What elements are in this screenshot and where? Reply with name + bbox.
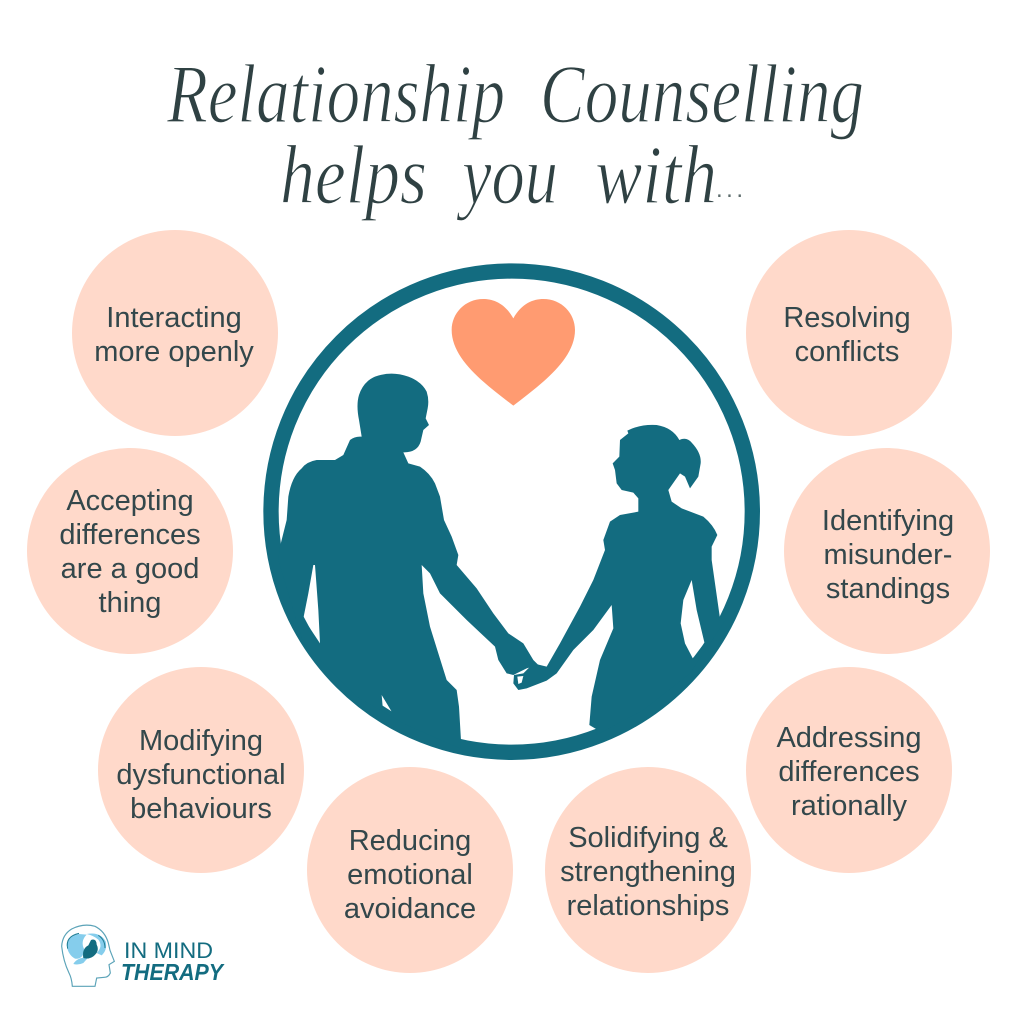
- panel: addressing differences rationally: Addressing: [776, 722, 922, 754]
- title: Relationship: [166, 48, 505, 141]
- logo wordmark: [121, 938, 225, 985]
- panel: accepting differences: [27, 448, 233, 654]
- panel: interacting more openly: Interacting: [106, 302, 242, 334]
- panel: accepting differences: thing: [99, 587, 161, 619]
- panel: modifying dysfunctional behaviours: dysfunctional: [116, 759, 286, 791]
- logo: In Mind Therapy: [62, 925, 225, 986]
- title: with: [595, 129, 717, 222]
- panel: reducing emotional avoidance: avoidance: [344, 893, 476, 925]
- panel: modifying dysfunctional behaviours: behaviours: [130, 793, 272, 825]
- panel: identifying misunderstandings: Identifying: [822, 505, 954, 537]
- panel: identifying misunderstandings: standings: [826, 573, 950, 605]
- icon: ring: [271, 271, 752, 752]
- panel: reducing emotional avoidance: Reducing: [349, 825, 471, 857]
- panel: solidifying and strengthening relationships: [545, 767, 751, 973]
- panel: modifying dysfunctional behaviours: Modifying: [139, 725, 263, 757]
- title: helps: [280, 129, 427, 222]
- panel: addressing differences rationally: differences: [778, 756, 920, 788]
- title: [166, 48, 864, 222]
- icon: woman silhouette: [513, 425, 727, 735]
- panel: interacting more openly: [72, 230, 278, 436]
- panel: addressing differences rationally: rationally: [791, 790, 908, 822]
- panel: solidifying and strengthening relationships: Solidifying &: [568, 822, 728, 854]
- panel: identifying misunderstandings: misunder-: [824, 539, 952, 571]
- icon: heart: [452, 299, 575, 406]
- panel: interacting more openly: more openly: [94, 336, 254, 368]
- logo wordmark: IN MIND: [124, 938, 213, 963]
- title: you: [456, 129, 558, 222]
- icon: clasped hands gap: [517, 676, 523, 684]
- panel: reducing emotional avoidance: [307, 767, 513, 973]
- panel: solidifying and strengthening relationships: relationships: [567, 890, 729, 922]
- panel: accepting differences: are a good: [61, 553, 199, 585]
- panel: reducing emotional avoidance: emotional: [347, 859, 473, 891]
- title: Counselling: [540, 48, 864, 141]
- panel: resolving conflicts: [746, 230, 952, 436]
- panel: resolving conflicts: Resolving: [783, 302, 911, 334]
- panel: accepting differences: Accepting: [66, 485, 194, 517]
- panel: accepting differences: differences: [59, 519, 201, 551]
- logo wordmark: THERAPY: [121, 959, 225, 985]
- central illustration: couple in ring: [271, 271, 752, 752]
- panel: identifying misunderstandings: [784, 448, 990, 654]
- panel: modifying dysfunctional behaviours: [98, 667, 304, 873]
- panel: resolving conflicts: conflicts: [795, 336, 899, 368]
- title: ...: [716, 176, 743, 203]
- icon: head outline with brain: [62, 925, 114, 986]
- panel: addressing differences rationally: [746, 667, 952, 873]
- panel: solidifying and strengthening relationships: strengthening: [560, 856, 736, 888]
- icon: man silhouette: [278, 374, 538, 748]
